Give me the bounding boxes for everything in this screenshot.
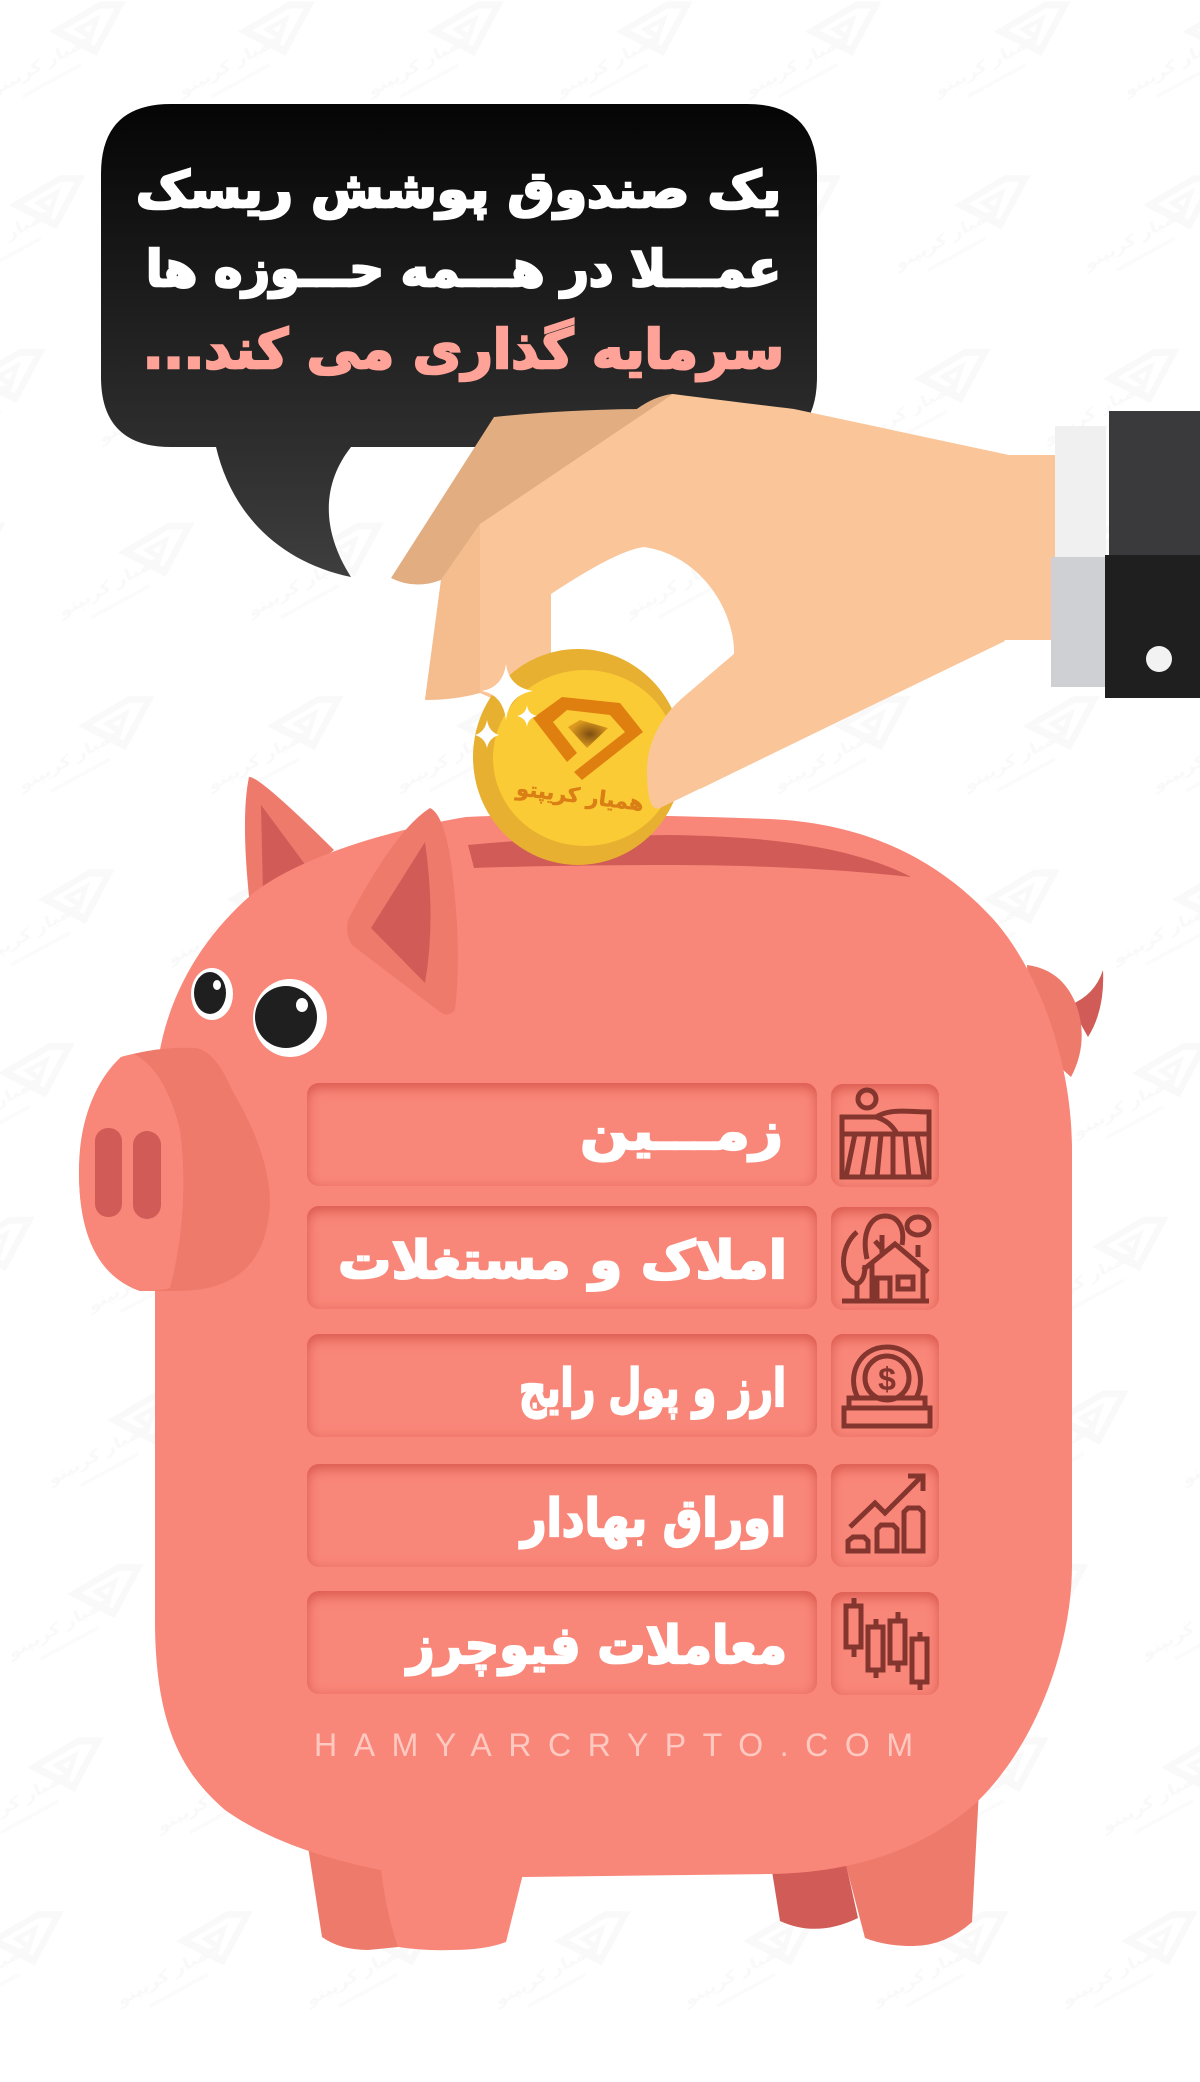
pig left leg <box>307 1840 524 1950</box>
row: securities label: اوراق بهادار <box>518 1489 786 1549</box>
row: real estate label: املاک و مستغلات <box>338 1231 787 1291</box>
hand back and fingers <box>391 394 1055 789</box>
row: land label: زمـــین <box>580 1102 783 1162</box>
icon: candlestick chart <box>831 1592 939 1695</box>
row: real estate label <box>307 1206 817 1309</box>
icon: coin on stand: $ <box>878 1361 896 1397</box>
row: securities label <box>307 1464 817 1567</box>
speech bubble <box>101 104 817 577</box>
website url: HAMYARCRYPTO.COM <box>314 1727 913 1763</box>
pig snout <box>79 1048 270 1291</box>
icon: farm field <box>831 1084 939 1187</box>
thumb <box>647 560 1005 809</box>
row: futures label <box>307 1591 817 1694</box>
headline text: عمـــلا در هـــمه حـــوزه ها <box>146 240 781 299</box>
pig back leg <box>771 1855 858 1929</box>
coin slot <box>468 835 911 877</box>
row: currency label <box>307 1334 817 1437</box>
headline text: سرمایه گذاری می کند... <box>143 318 784 381</box>
pig right leg <box>842 1790 979 1946</box>
coin text: همیار کریپتو <box>514 776 645 816</box>
pig far ear <box>245 777 334 915</box>
shirt cuff <box>1051 426 1106 687</box>
pig tail <box>1027 965 1103 1077</box>
headline text: یک صندوق پوشش ریسک <box>136 161 781 220</box>
pig eyes <box>191 968 327 1057</box>
row: currency label: ارز و پول رایج <box>519 1359 786 1419</box>
pig body <box>155 815 1072 1877</box>
jacket sleeve <box>1105 411 1200 698</box>
gold coin <box>473 649 683 865</box>
headline text <box>136 161 784 381</box>
icon: coin on stand <box>831 1334 939 1437</box>
pig near ear <box>347 808 458 1015</box>
row: land label <box>307 1083 817 1186</box>
coin logo <box>533 697 643 780</box>
icon: growth chart <box>831 1464 939 1567</box>
sparkles <box>475 664 537 748</box>
row: futures label: معاملات فیوچرز <box>404 1616 787 1676</box>
icon: house and trees <box>831 1207 939 1310</box>
